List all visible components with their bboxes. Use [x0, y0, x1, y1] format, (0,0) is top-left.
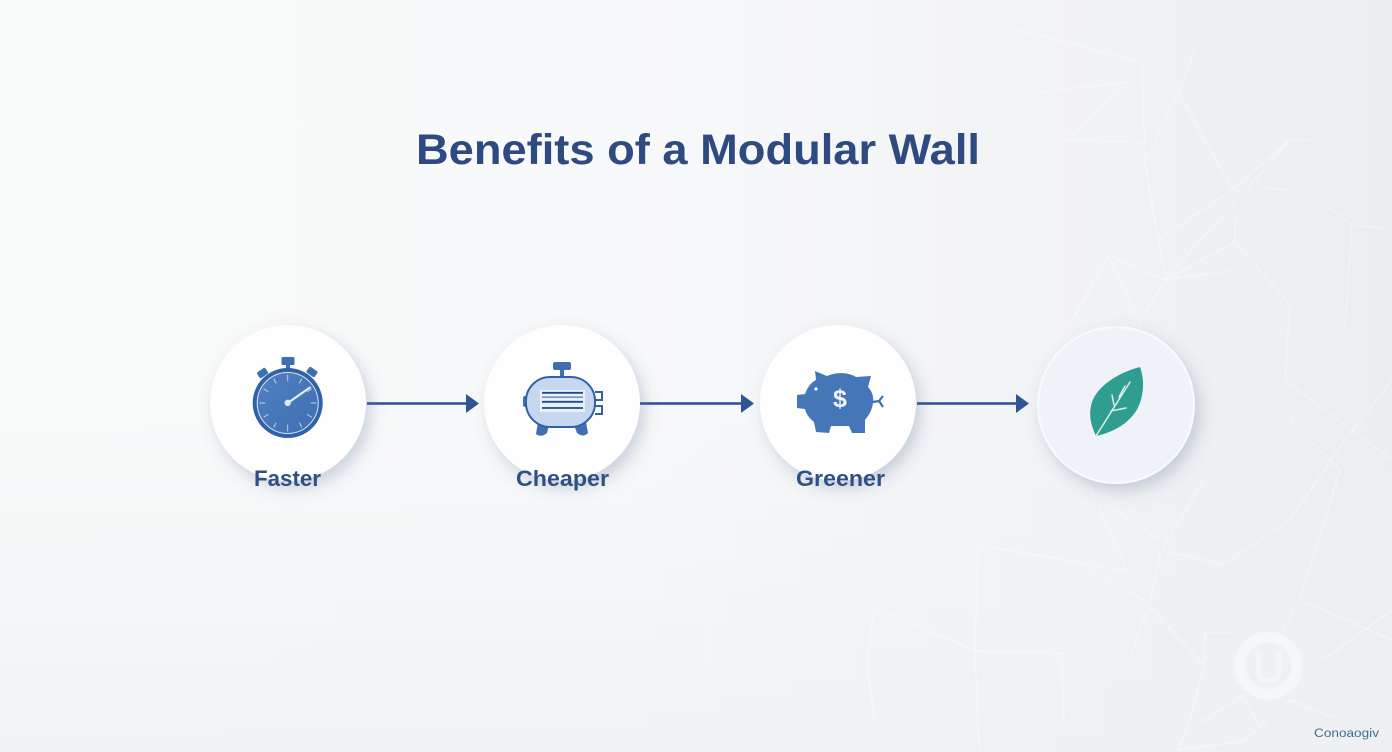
icon: leaf [1090, 367, 1143, 436]
arrow: greener to leaf [917, 394, 1029, 413]
icon: stopwatch [253, 357, 323, 438]
circle: greener [760, 325, 916, 481]
background network pattern [632, 28, 1392, 750]
circle: leaf [1038, 327, 1194, 483]
step: cheaper [484, 325, 640, 491]
label: Cheaper: Cheaper [516, 466, 609, 491]
brand text: Conoaogiv [1314, 728, 1379, 740]
step: leaf [1038, 327, 1194, 483]
title: Benefits of a Modular Wall [416, 126, 980, 174]
icon: piggy bank: $ [833, 385, 847, 413]
circle: cheaper [484, 325, 640, 481]
label: Faster: Faster [254, 466, 321, 491]
icon: motor [523, 362, 602, 436]
step: greener [760, 325, 916, 491]
logo mark [1240, 637, 1297, 694]
circle: faster [210, 325, 366, 481]
arrow: cheaper to greener [640, 394, 754, 413]
step: faster [210, 325, 366, 491]
icon: piggy bank [797, 371, 883, 433]
label: Greener: Greener [796, 466, 885, 491]
arrow: faster to cheaper [367, 394, 479, 413]
